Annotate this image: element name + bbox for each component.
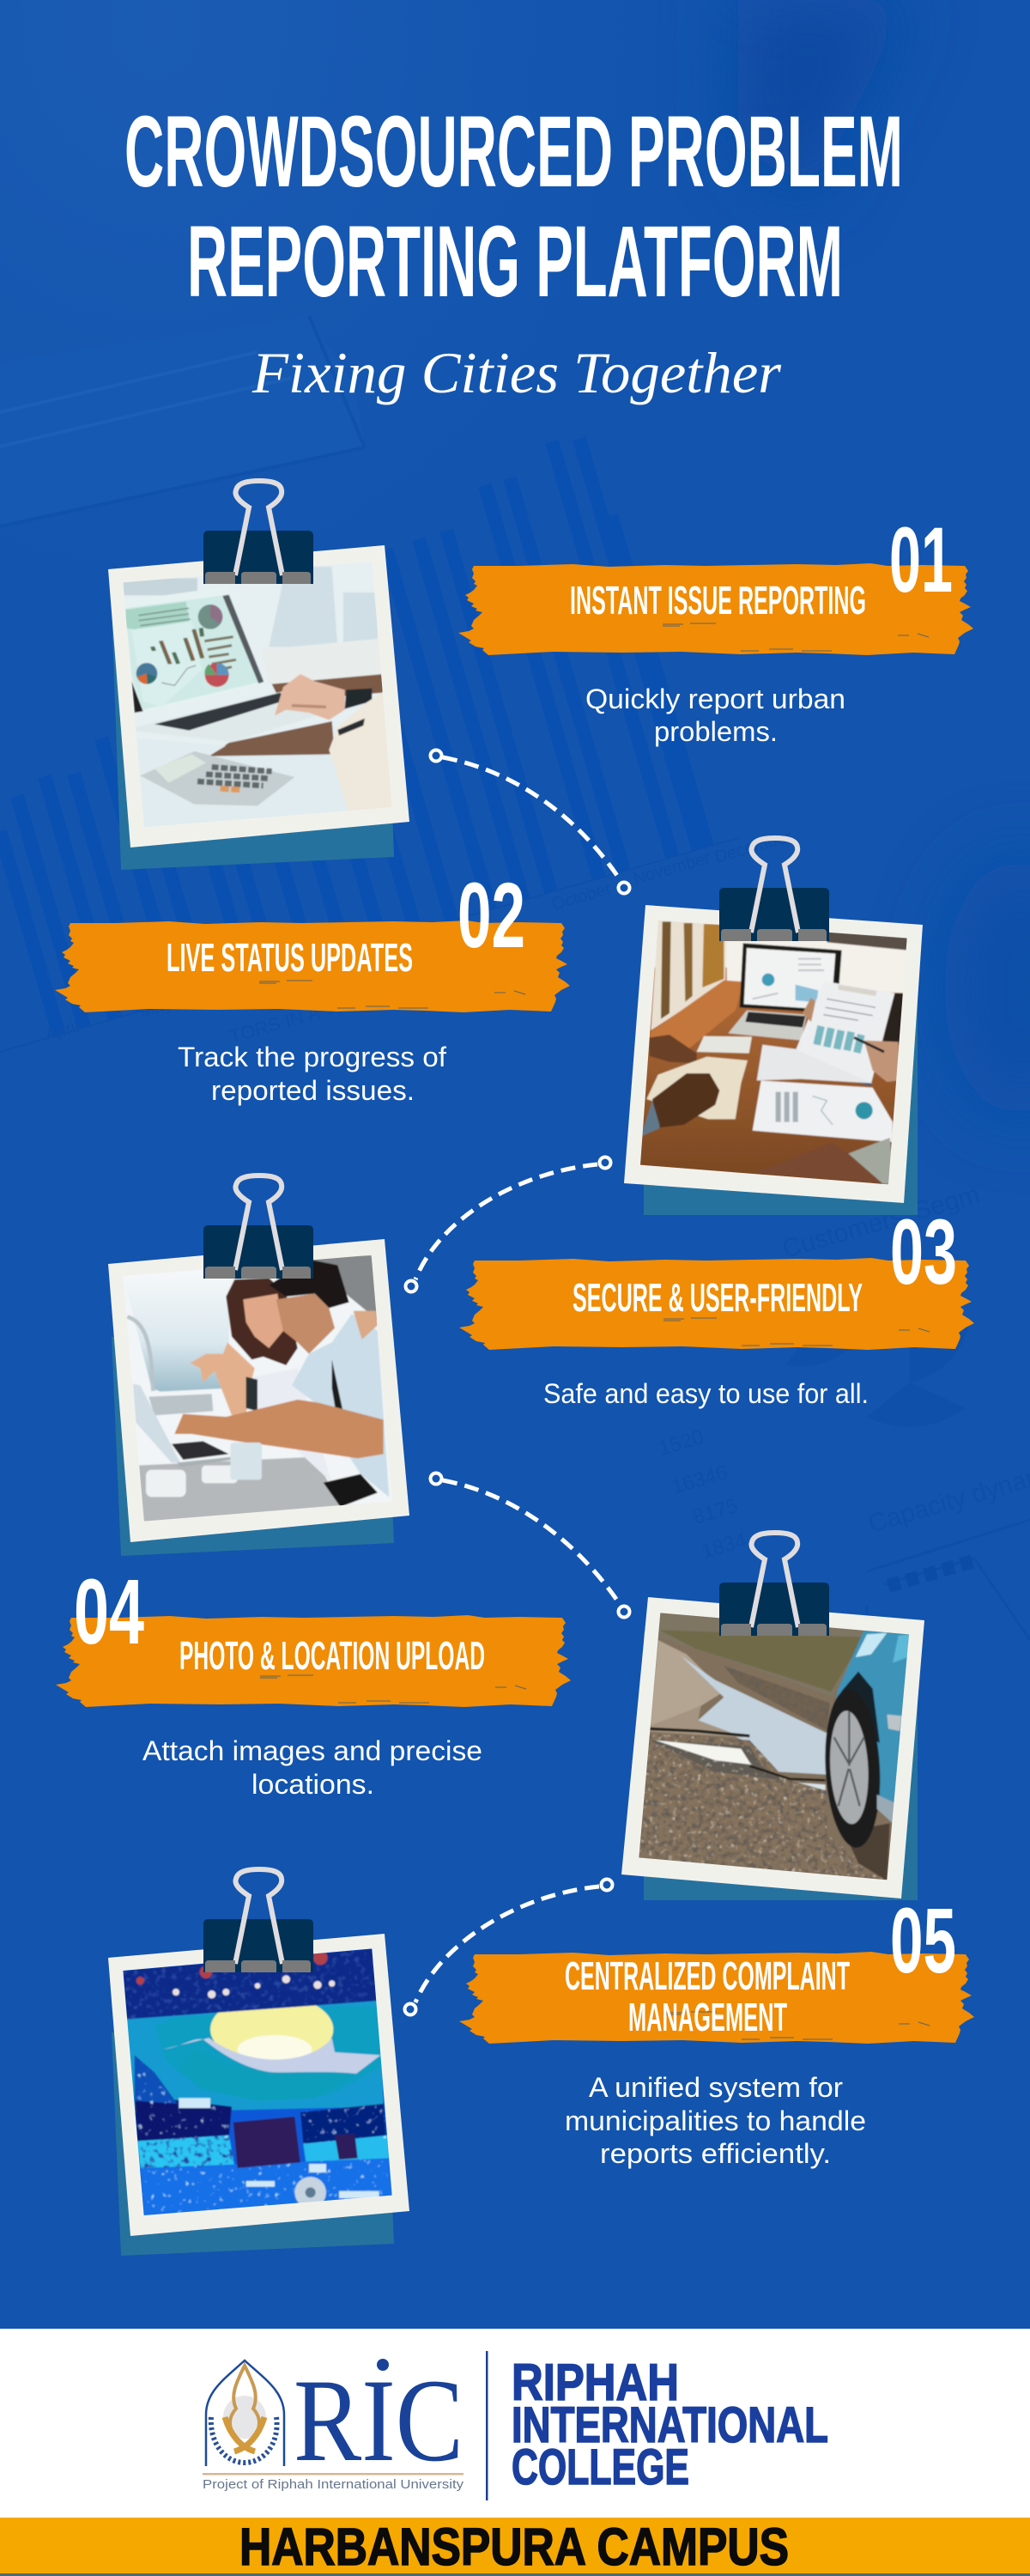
arrow: connector 4 to 5: [405, 1879, 613, 2014]
photo: laptop with charts and calculator: [124, 562, 391, 827]
background: blue with faint chart photo: May: [137, 994, 174, 1022]
panel: step 4 banner: PHOTO & LOCATION UPLOAD: [179, 1633, 485, 1678]
panel: step 4 polaroid: [621, 1597, 924, 1900]
text: step 5 description: reports efficiently.: [600, 2138, 831, 2169]
background: blue with faint chart photo: [0, 0, 968, 1592]
text: project line: Project of Riphah International University: [203, 2477, 464, 2492]
text: step 5 description: [565, 2072, 866, 2169]
text: step 5 description: A unified system for: [589, 2072, 843, 2103]
arrow: connector 1 to 2: [431, 750, 630, 893]
icon: RIC emblem: [206, 2360, 284, 2466]
photo: circuit board: [123, 1948, 392, 2215]
text: step 2 description: Track the progress of: [178, 1042, 446, 1072]
text: step 2 description: reported issues.: [211, 1075, 415, 1106]
background: blue with faint chart photo: 1834: [699, 1528, 749, 1564]
panel: step 1 banner: 01: [889, 507, 953, 611]
panel: step 2 banner: 02: [457, 863, 525, 967]
background: blue with faint chart photo: November: [631, 848, 712, 889]
background: blue with faint chart photo: TORS IN A YEAR: [227, 986, 375, 1048]
arrow: connector 3 to 4: [431, 1473, 630, 1618]
icon: binder clip 5: [203, 1869, 313, 1972]
photo: couple using a laptop: [124, 1255, 391, 1522]
background: blue with faint chart photo: December: [712, 827, 794, 867]
icon: binder clip 2: [719, 838, 829, 941]
panel: step 1 banner: [458, 507, 973, 655]
panel: step 2 banner: LIVE STATUS UPDATES: [167, 935, 413, 980]
panel: step 5 banner: [459, 1888, 974, 2044]
text: college name: RIPHAH: [512, 2354, 679, 2411]
text: step 2 description: [178, 1042, 446, 1106]
text: step 4 description: Attach images and precise: [142, 1735, 482, 1766]
panel: step 2 banner: [55, 863, 570, 1012]
icon: binder clip 1: [203, 481, 313, 584]
text: step 1 description: Quickly report urban: [585, 683, 845, 714]
faint bar chart: [0, 438, 712, 1025]
text: RIC wordmark: RIC: [294, 2354, 464, 2486]
photo: team reviewing reports on wooden desk: [640, 920, 907, 1185]
icon: binder clip 3: [203, 1176, 313, 1279]
panel: step 4 banner: [56, 1559, 571, 1707]
panel: step 2 polaroid: [624, 905, 923, 1215]
icon: binder clip 4: [719, 1533, 829, 1636]
text: step 5 description: municipalities to handle: [565, 2105, 866, 2136]
panel: step 3 banner: [459, 1200, 974, 1350]
background: blue with faint chart photo: Customers' Segm: [779, 1181, 983, 1264]
panel: step 3 banner: 03: [890, 1200, 957, 1303]
text: step 3 description: Safe and easy to use for all.: [543, 1378, 869, 1409]
panel: step 4 banner: 04: [74, 1559, 144, 1663]
text: step 4 description: locations.: [251, 1769, 374, 1800]
text: college name: [512, 2354, 828, 2495]
arrow: connector 2 to 3: [405, 1157, 611, 1291]
panel: step 1 polaroid: [108, 545, 409, 870]
text: step 1 description: problems.: [654, 716, 778, 747]
text: college name: INTERNATIONAL: [512, 2397, 828, 2453]
panel: step 5 banner: 05: [890, 1888, 956, 1992]
footer: campus band: [0, 2518, 1030, 2576]
background: blue with faint chart photo: October: [549, 879, 614, 914]
title: [124, 95, 903, 319]
text: college name: COLLEGE: [512, 2439, 689, 2495]
subtitle: Fixing Cities Together: [251, 340, 782, 405]
panel: step 3 polaroid: [108, 1239, 409, 1556]
panel: step 5 polaroid: [108, 1934, 409, 2256]
text: step 1 description: [585, 683, 845, 747]
text: step 4 description: [142, 1735, 482, 1800]
footer: campus band: HARBANSPURA CAMPUS: [239, 2518, 789, 2576]
background: blue with faint chart photo: April: [43, 1018, 82, 1045]
background: blue with faint chart photo: 8175: [690, 1494, 741, 1529]
background: blue with faint chart photo: 1520: [656, 1425, 706, 1461]
panel: step 5 banner: MANAGEMENT: [628, 1995, 787, 2039]
footer: white logo strip: [0, 2329, 1030, 2518]
background: blue with faint chart photo: 16346: [669, 1461, 730, 1499]
photo: pothole on a road beside a blue car: [639, 1613, 909, 1880]
